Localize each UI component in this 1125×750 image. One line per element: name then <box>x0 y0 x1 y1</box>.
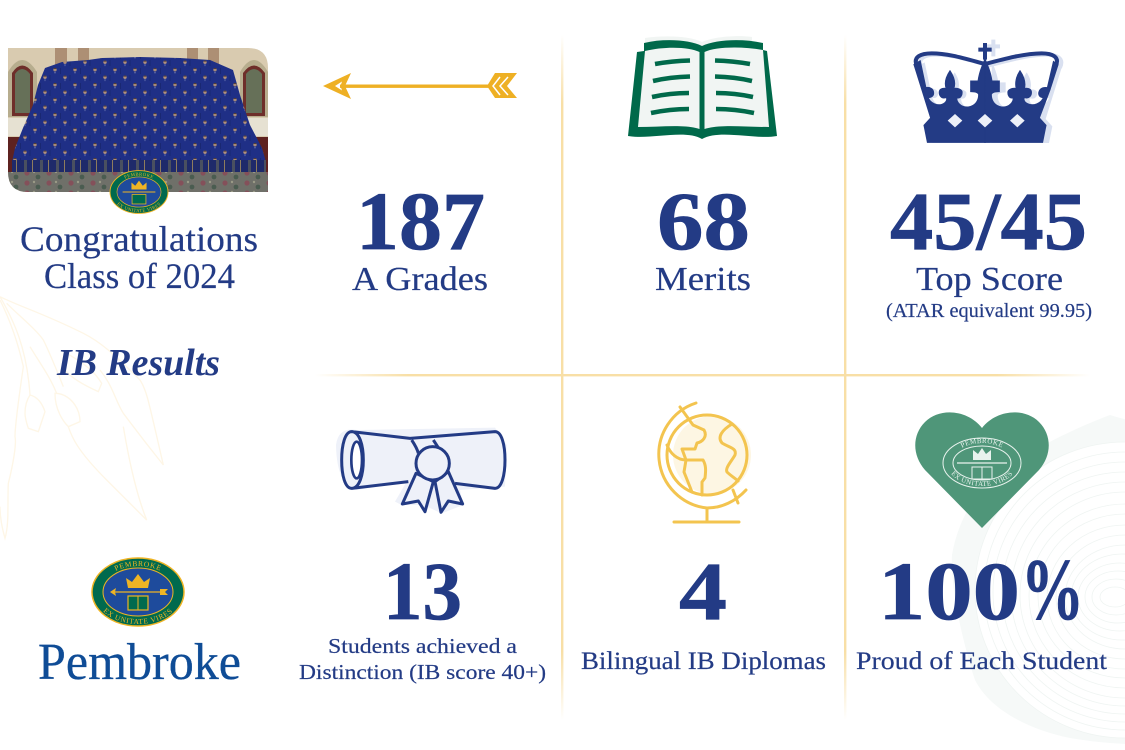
stat: 45/45 top score <box>886 175 1092 322</box>
stat: 45/45 top score: (ATAR equivalent 99.95) <box>886 300 1092 322</box>
photo crest: EX UNITATE VIRES <box>117 202 160 212</box>
stat: 45/45 top score: Top Score <box>916 261 1063 298</box>
heading: congratulations: Congratulations <box>20 219 258 259</box>
grid divider: vertical right <box>844 35 846 720</box>
logo wordmark: Pembroke <box>38 634 241 691</box>
photo crest: PEMBROKE <box>124 172 154 179</box>
heading: congratulations: Class of 2024 <box>44 256 235 296</box>
stat: 13 distinctions: 13 <box>383 545 462 637</box>
stat: 100% proud: 100 <box>878 545 1020 637</box>
class photo <box>8 48 268 192</box>
icon: arrow <box>323 73 517 99</box>
stat: 4 bilingual diplomas <box>581 545 826 675</box>
heading: congratulations <box>20 219 258 296</box>
stat: 187 A Grades: 187 <box>356 175 485 267</box>
stat: 13 distinctions: Students achieved a <box>328 634 518 658</box>
grid divider: horizontal <box>315 374 1090 376</box>
stat: 68 Merits: Merits <box>655 261 751 298</box>
icon: crown <box>914 40 1062 143</box>
background: tree rings <box>952 415 1125 745</box>
stat: 187 A Grades <box>352 175 488 298</box>
stat: 4 bilingual diplomas: 4 <box>679 545 727 637</box>
photo crest <box>110 170 168 214</box>
icon: diploma scroll <box>336 428 507 513</box>
stat: 187 A Grades: A Grades <box>352 261 488 298</box>
stat: 100% proud: Proud of Each Student <box>856 648 1107 675</box>
logo: Pembroke crest: PEMBROKE <box>114 561 162 571</box>
stat: 4 bilingual diplomas: Bilingual IB Diplomas <box>581 648 826 675</box>
stat: 100% proud: % <box>1021 542 1084 639</box>
stat: 68 Merits <box>655 175 751 298</box>
icon: heart with crest: PEMBROKE <box>960 438 1004 448</box>
stat: 13 distinctions <box>299 545 546 684</box>
grid divider: vertical left <box>561 35 563 720</box>
background: gold leaf outline <box>0 297 163 538</box>
logo: Pembroke crest <box>91 557 185 627</box>
icon: open book <box>628 36 777 139</box>
icon: globe <box>659 403 751 522</box>
icon: heart with crest <box>915 412 1049 528</box>
icon: heart with crest: EX UNITATE VIRES <box>951 470 1012 486</box>
stat: 45/45 top score: 45/45 <box>890 175 1087 267</box>
stat: 100% proud <box>856 542 1107 675</box>
stat: 13 distinctions: Distinction (IB score 40+) <box>299 660 546 684</box>
stat: 68 Merits: 68 <box>657 175 750 267</box>
heading: IB results: IB Results <box>56 342 220 384</box>
logo: Pembroke crest: EX UNITATE VIRES <box>103 608 172 624</box>
